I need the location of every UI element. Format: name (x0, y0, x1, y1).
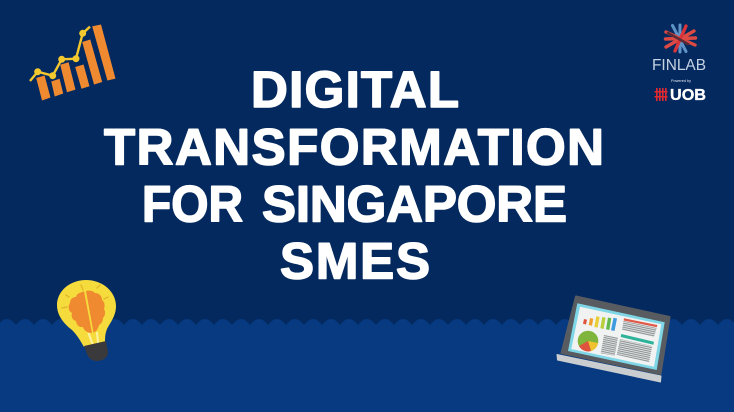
brain (69, 292, 92, 333)
text panels (601, 318, 657, 362)
filaments (88, 332, 98, 344)
title: DIGITAL (251, 61, 459, 118)
icon: rising bar chart (30, 25, 115, 100)
FinLab wordmark: FINLAB (652, 57, 706, 74)
logo: FinLab powered by UOB (652, 25, 706, 104)
title: SMES (280, 232, 430, 290)
icon: FinLab star mark (666, 25, 696, 52)
powered by caption: Powered by (671, 79, 691, 83)
title: SINGAPORE (262, 176, 567, 232)
icon: UOB red grid (654, 88, 668, 101)
title: FOR (142, 176, 243, 232)
title: TRANSFORMATION (104, 118, 604, 176)
title (104, 61, 604, 290)
icon: light bulb with brain (57, 280, 116, 361)
dashboard bars (583, 316, 617, 331)
UOB wordmark: UOB (670, 87, 706, 104)
bulb rays (62, 285, 108, 308)
wavy lower band (0, 319, 734, 412)
bulb base (84, 341, 108, 361)
pie chart (578, 331, 598, 351)
screen (568, 303, 665, 370)
laptop base (557, 354, 661, 382)
icon: laptop with dashboard (557, 296, 670, 382)
laptop lid (562, 296, 670, 374)
